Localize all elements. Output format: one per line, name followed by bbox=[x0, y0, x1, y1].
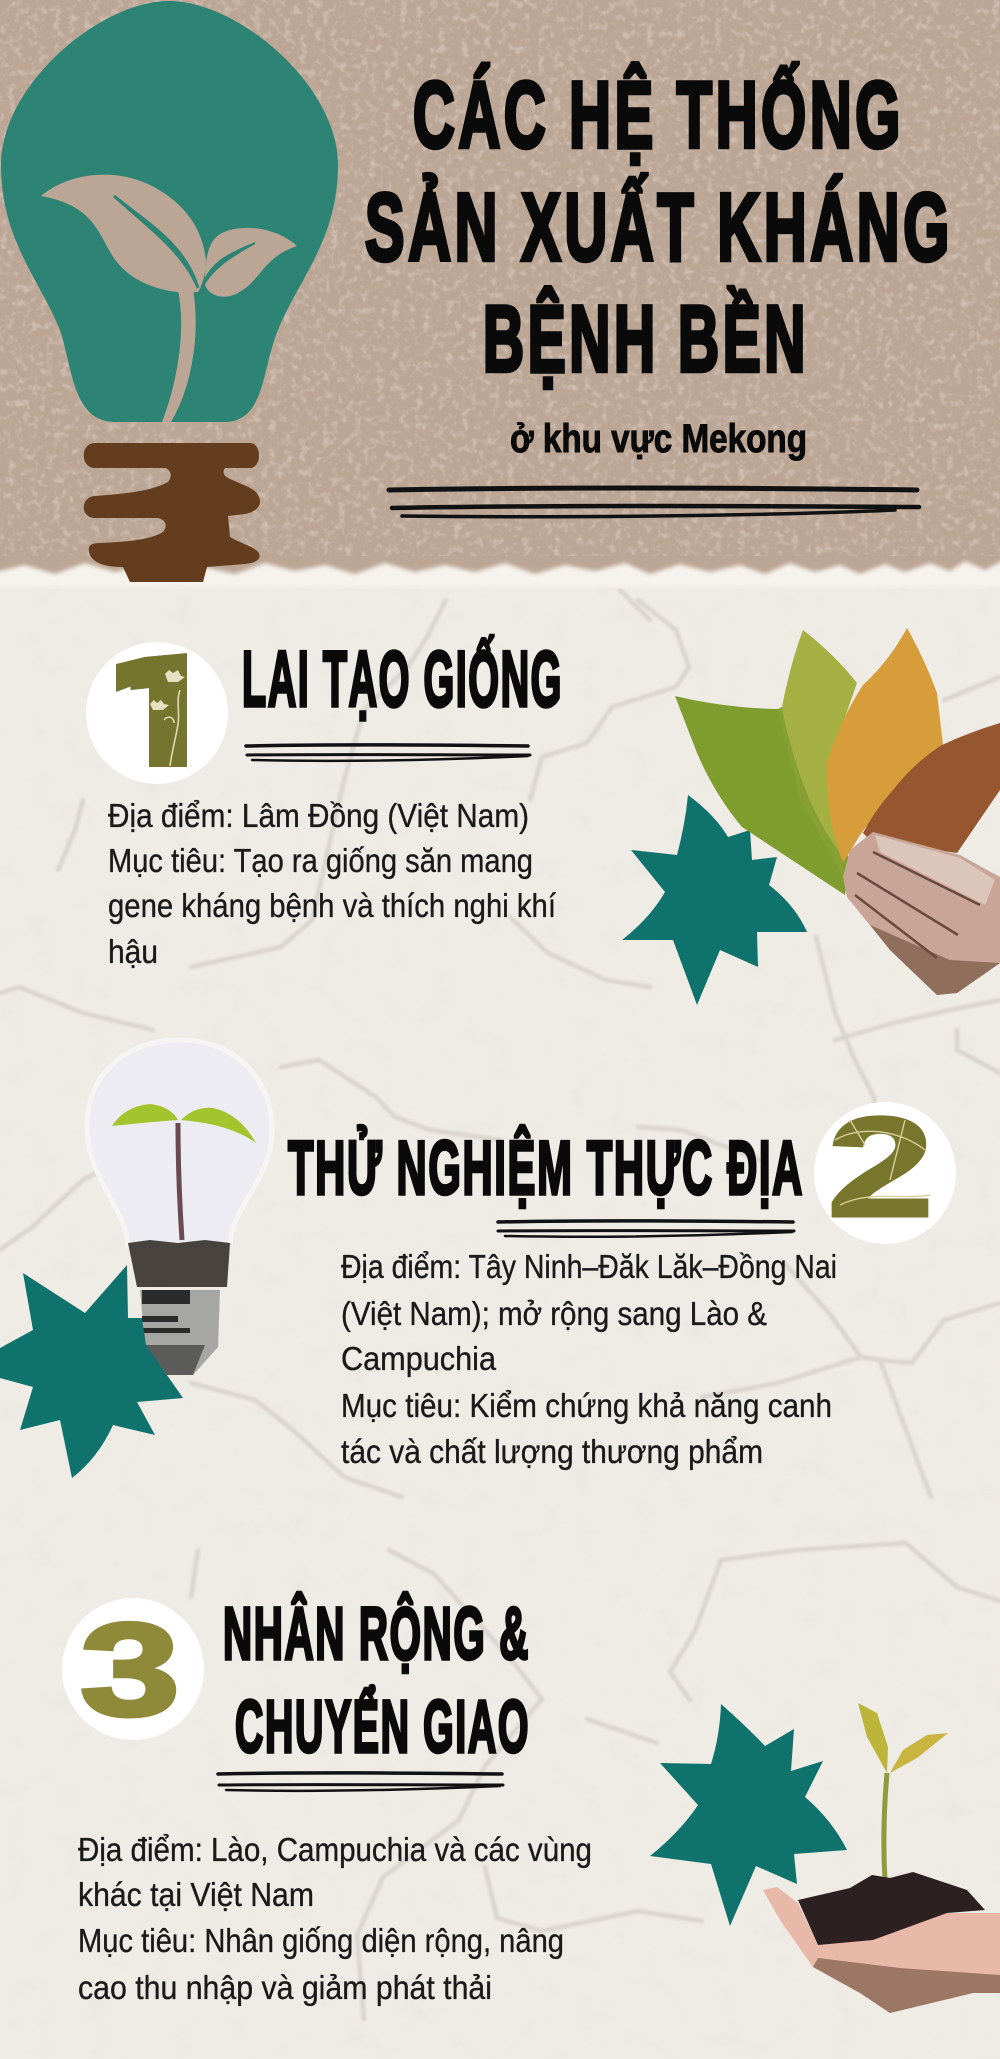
section 2 body text bbox=[341, 1248, 837, 1470]
section 3 underline bbox=[218, 1773, 503, 1791]
leaf veins bbox=[114, 196, 198, 288]
seedling stem bbox=[884, 1773, 887, 1880]
teal star 1 bbox=[622, 795, 807, 1005]
section 1 body text: hậu bbox=[108, 933, 158, 970]
green leaf bbox=[675, 696, 850, 895]
icon: hand holding four leaves bbox=[675, 628, 1000, 995]
bulb glass bbox=[1, 1, 338, 422]
sprout cutout bbox=[41, 175, 297, 422]
icon: teal light bulb with sprout bbox=[1, 1, 338, 582]
section 3 body text: Mục tiêu: Nhân giống diện rộng, nâng bbox=[78, 1922, 564, 1959]
section 3 body text: cao thu nhập và giảm phát thải bbox=[78, 1969, 492, 2006]
section 3 heading bbox=[223, 1592, 530, 1768]
bulb screw base bbox=[84, 443, 260, 582]
section 1 body text bbox=[108, 797, 556, 970]
section 1 body text: Địa điểm: Lâm Đồng (Việt Nam) bbox=[108, 797, 529, 834]
bulb glass bbox=[87, 1040, 272, 1245]
section 3: scale-up bbox=[62, 1592, 1000, 2013]
section 1: breeding bbox=[80, 619, 1000, 1005]
seedling stem bbox=[178, 1123, 182, 1240]
soil bbox=[798, 1872, 985, 1945]
section 3 body text: Địa điểm: Lào, Campuchia và các vùng bbox=[78, 1831, 592, 1868]
section 2: field trials bbox=[0, 1040, 956, 1478]
section 2 underline bbox=[498, 1221, 794, 1237]
teal star 3 bbox=[650, 1704, 847, 1926]
torn paper header bbox=[0, 0, 1000, 587]
orange leaf bbox=[827, 628, 943, 863]
section 2 body text: Mục tiêu: Kiểm chứng khả năng canh bbox=[341, 1387, 832, 1424]
subtitle: ở khu vực Mekong bbox=[510, 417, 807, 461]
seedling leaves bbox=[112, 1104, 178, 1126]
lime leaf bbox=[782, 630, 857, 853]
section 1 heading: LAI TẠO GIỐNG bbox=[242, 634, 563, 723]
number badge 3: 3 bbox=[80, 1596, 180, 1743]
brown leaf bbox=[863, 723, 1000, 853]
number badge 1: 1 bbox=[80, 619, 228, 802]
socket soil bbox=[128, 1240, 230, 1287]
number badge 2 bbox=[814, 1088, 956, 1247]
section 2 body text: tác và chất lượng thương phẩm bbox=[341, 1433, 763, 1470]
hand bbox=[843, 832, 1000, 995]
title underline bbox=[389, 488, 919, 517]
hand bbox=[763, 1887, 1000, 2013]
number badge 1 bbox=[86, 642, 228, 784]
section 2 body text: (Việt Nam); mở rộng sang Lào & bbox=[341, 1295, 767, 1332]
section 1 underline bbox=[246, 745, 530, 761]
section 3 body text: khác tại Việt Nam bbox=[78, 1876, 314, 1913]
title bbox=[365, 62, 953, 391]
seedling leaves bbox=[858, 1703, 888, 1773]
icon: glass bulb with seedling bbox=[87, 1040, 272, 1375]
section 3 body text bbox=[78, 1831, 592, 2006]
number badge 3 bbox=[62, 1596, 204, 1743]
section 2 body text: Địa điểm: Tây Ninh–Đăk Lăk–Đồng Nai bbox=[341, 1248, 837, 1285]
number badge 2: 2 bbox=[827, 1088, 934, 1247]
icon: hand holding soil and seedling bbox=[763, 1703, 1000, 2013]
section 3 heading: NHÂN RỘNG & bbox=[223, 1592, 530, 1675]
section 1 body text: Mục tiêu: Tạo ra giống săn mang bbox=[108, 842, 533, 879]
teal star 2 bbox=[0, 1265, 183, 1478]
metal screw bbox=[140, 1290, 220, 1375]
section 1 body text: gene kháng bệnh và thích nghi khí bbox=[108, 887, 556, 924]
section 2 body text: Campuchia bbox=[341, 1340, 497, 1377]
section 3 heading: CHUYỂN GIAO bbox=[235, 1685, 530, 1768]
